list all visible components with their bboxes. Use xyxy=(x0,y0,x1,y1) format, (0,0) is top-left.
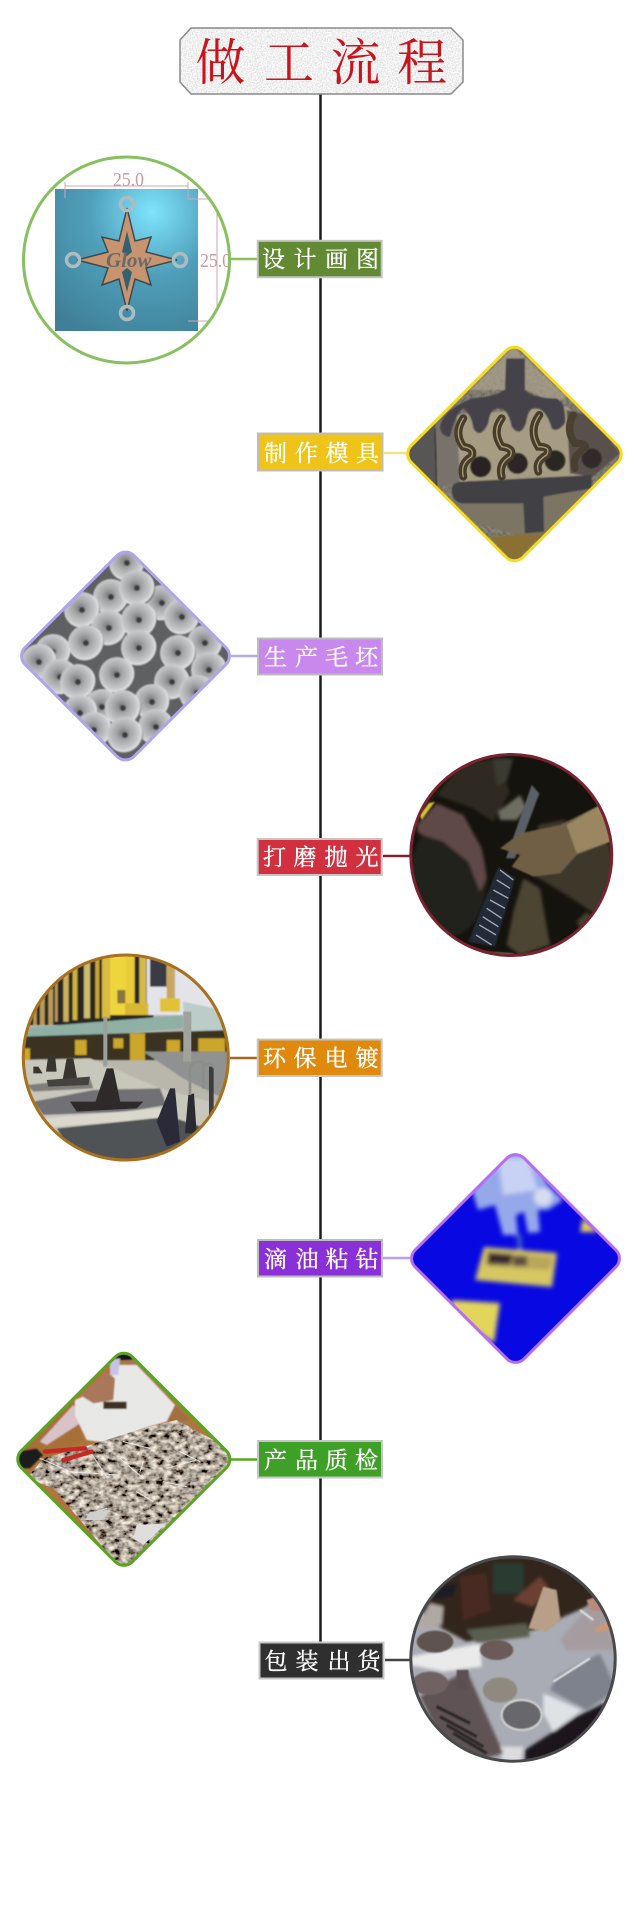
step 5: 环保电镀 xyxy=(20,950,382,1165)
label xyxy=(258,839,382,875)
label: 滴油粘钻 xyxy=(264,1247,378,1272)
label xyxy=(258,1441,382,1478)
step 8: 包装出货 xyxy=(260,1550,625,1770)
label xyxy=(258,1040,382,1076)
photo: glue and rhinestones xyxy=(410,1153,621,1364)
label xyxy=(258,241,382,277)
label xyxy=(258,638,382,674)
connector xyxy=(230,1057,257,1059)
connector xyxy=(230,258,257,260)
label: 设计画图 xyxy=(262,247,379,272)
photo: packing xyxy=(409,1555,617,1763)
label xyxy=(258,1240,382,1276)
step 7: 产品质检 xyxy=(16,1352,383,1567)
photo: design drawing: 25.0 xyxy=(113,169,144,191)
connector xyxy=(383,855,411,857)
photo: polishing xyxy=(409,753,614,957)
label: 生产毛坯 xyxy=(264,645,379,670)
step 6: 滴油粘钻 xyxy=(258,1145,630,1370)
connector xyxy=(384,452,408,454)
connector xyxy=(383,1257,412,1259)
connector xyxy=(231,655,257,657)
timeline spine xyxy=(319,94,322,1642)
photo: plating line xyxy=(20,950,235,1165)
step 2: 制作模具 xyxy=(257,346,623,562)
label: 打磨抛光 xyxy=(263,845,378,870)
label: 包装出货 xyxy=(264,1649,382,1674)
connector xyxy=(231,1458,257,1461)
label: 环保电镀 xyxy=(263,1046,378,1071)
label: 制作模具 xyxy=(264,441,380,466)
step 3: 生产毛坯 xyxy=(15,545,382,770)
photo: design drawing: Glow xyxy=(106,248,152,272)
step 4: 打磨抛光 xyxy=(258,745,625,965)
photo: mould xyxy=(406,346,623,562)
label: 产品质检 xyxy=(264,1448,378,1473)
title: 做工流程 xyxy=(196,35,447,91)
label xyxy=(260,1642,384,1678)
label xyxy=(258,434,382,470)
step 1: 设计画图 xyxy=(20,155,382,370)
photo: design drawing: 25.0 xyxy=(200,250,231,272)
photo: metal blanks xyxy=(20,550,231,762)
connector xyxy=(385,1659,411,1661)
photo: design drawing xyxy=(20,155,235,370)
photo: quality inspection xyxy=(16,1352,232,1567)
